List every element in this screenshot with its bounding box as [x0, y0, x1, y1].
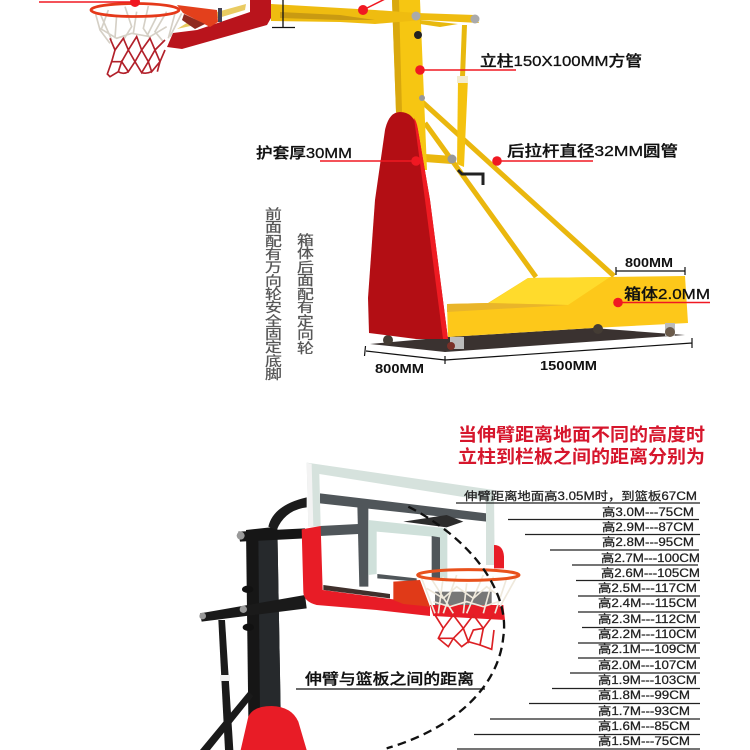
- vertical note: rear wheels: 轮: [297, 342, 314, 357]
- vertical note: front wheels: 前: [265, 208, 282, 223]
- callout: top red marker: [39, 0, 140, 7]
- table: height to distance rows: 高2.4M---115CM: [598, 596, 697, 610]
- ground shadow: [370, 328, 685, 352]
- vertical note: front wheels: 面: [265, 221, 282, 236]
- vertical note: rear wheels: 向: [297, 328, 314, 343]
- vertical note: rear wheels: [297, 234, 314, 357]
- vertical note: rear wheels: 面: [297, 274, 314, 289]
- table: height to distance rows: 高2.8M---95CM: [602, 535, 694, 549]
- bolts: [412, 12, 480, 164]
- upper product: yellow hoop stand: [91, 0, 688, 352]
- callout: pad thickness: 护套厚30MM: [256, 145, 352, 162]
- table: height to distance rows: 高2.9M---87CM: [602, 520, 694, 534]
- rim bracket: [393, 580, 430, 607]
- side tube: [457, 25, 468, 167]
- vertical note: front wheels: 定: [265, 341, 282, 356]
- vertical note: front wheels: 配: [265, 235, 282, 250]
- vertical note: front wheels: 底: [265, 355, 282, 370]
- callout: column: [415, 52, 642, 75]
- vertical note: rear wheels: 后: [297, 261, 314, 276]
- backboard glass hint: [177, 4, 246, 29]
- wheels: [383, 323, 675, 350]
- black post: [246, 527, 281, 717]
- vertical note: rear wheels: 有: [297, 301, 314, 316]
- vertical note: front wheels: 轮: [265, 288, 282, 303]
- backboard lower pad: [167, 0, 271, 49]
- title: distance table: 当伸臂距离地面不同的高度时: [458, 424, 705, 445]
- table: height to distance rows: 高2.1M---109CM: [598, 642, 697, 656]
- callout: rear brace: [492, 142, 678, 166]
- vertical note: front wheels: 有: [265, 248, 282, 263]
- table: height to distance rows: 高2.0M---107CM: [598, 658, 697, 672]
- yellow arm: [271, 4, 479, 24]
- vertical note: front wheels: 全: [265, 314, 282, 330]
- table: height to distance rows: [456, 489, 700, 749]
- yellow ballast base: [447, 276, 688, 337]
- hoop rim: [91, 4, 179, 16]
- rim: [418, 570, 519, 580]
- vertical note: rear wheels: 定: [297, 315, 314, 330]
- hoop net white: [95, 6, 182, 43]
- net white: [422, 575, 517, 613]
- dimension: box top 800MM: 800MM: [625, 255, 673, 270]
- callout: box thickness: 箱体2.0MM: [624, 286, 710, 303]
- table: height to distance rows: 高1.7M---93CM: [598, 704, 690, 718]
- callout: column: 立柱150X100MM方管: [480, 52, 642, 70]
- net red: [435, 615, 494, 649]
- vertical note: front wheels: 固: [265, 328, 282, 343]
- dimension: depth 800MM: [364, 346, 445, 376]
- table: height to distance rows: 高2.2M---110CM: [598, 627, 697, 641]
- backboard glass frame: [307, 463, 495, 565]
- table: height to distance rows: 高3.0M---75CM: [602, 505, 694, 519]
- callout: top arm marker: [272, 0, 389, 28]
- vertical note: front wheels: [265, 208, 282, 383]
- label: arm to board distance: 伸臂与篮板之间的距离: [305, 670, 474, 688]
- backboard red pad: [302, 526, 505, 620]
- dimension: depth 800MM: 800MM: [375, 361, 424, 376]
- vertical note: rear wheels: 体: [297, 247, 314, 262]
- crank handle: [458, 170, 483, 185]
- black arms: [199, 497, 307, 750]
- yellow post: [392, 0, 427, 170]
- table: height to distance rows: 高1.5M---75CM: [598, 734, 690, 748]
- lower product: black hoop stand: [199, 463, 519, 750]
- backboard inner structure: [320, 493, 492, 605]
- distance arc dashed: [387, 507, 504, 748]
- vertical note: rear wheels: 配: [297, 288, 314, 303]
- vertical note: front wheels: 向: [265, 275, 282, 290]
- table: height to distance rows: 高1.8M---99CM: [598, 688, 690, 702]
- dimension: length 1500MM: [445, 338, 692, 373]
- dimension: length 1500MM: 1500MM: [540, 358, 597, 373]
- title: distance table: [458, 424, 705, 467]
- table: height to distance rows: 高1.6M---85CM: [598, 719, 690, 733]
- vertical note: front wheels: 万: [265, 261, 282, 276]
- red protective pad: [368, 112, 448, 339]
- dimension: box top 800MM: [616, 255, 685, 275]
- hoop net red: [107, 37, 165, 77]
- callout: pad thickness: [256, 145, 421, 166]
- table: height to distance rows: 高1.9M---103CM: [598, 673, 697, 687]
- table: height to distance rows: 高2.5M---117CM: [598, 581, 697, 595]
- vertical note: front wheels: 安: [265, 301, 282, 316]
- rim bracket: [177, 5, 222, 29]
- table: height to distance rows: 高2.6M---105CM: [601, 566, 700, 580]
- table: height to distance rows: 高2.7M---100CM: [601, 551, 700, 565]
- title: distance table: 立柱到栏板之间的距离分别为: [458, 446, 705, 467]
- vertical note: rear wheels: 箱: [297, 234, 314, 249]
- vertical note: front wheels: 脚: [265, 368, 282, 383]
- callout: box thickness: [613, 286, 710, 307]
- table: height to distance rows: 高2.3M---112CM: [598, 612, 697, 626]
- rear braces: [418, 98, 614, 277]
- table: height to distance rows: 伸臂距离地面高3.05M时，到篮板67CM: [464, 489, 697, 503]
- callout: rear brace: 后拉杆直径32MM圆管: [507, 142, 678, 160]
- red pad of lower stand: [241, 706, 307, 750]
